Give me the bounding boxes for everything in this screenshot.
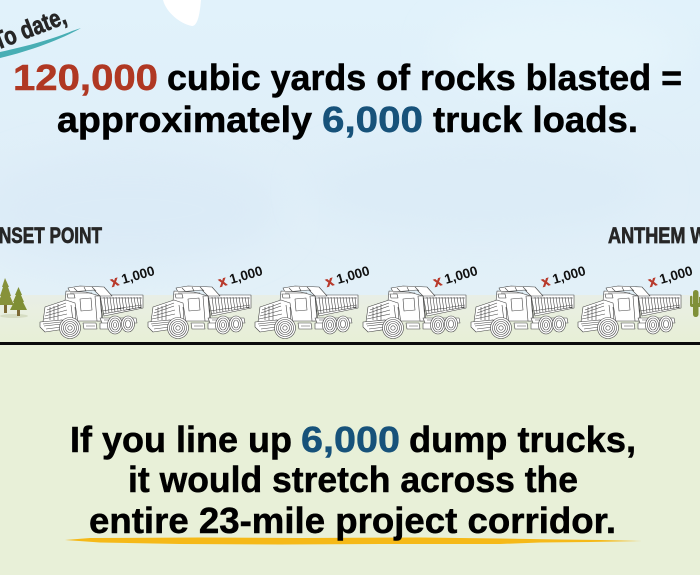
sky background bbox=[0, 0, 700, 300]
title: 6,000 bbox=[322, 99, 423, 140]
icon: pine trees bbox=[0, 278, 28, 318]
lower panel background bbox=[0, 345, 700, 575]
truck 3: x bbox=[323, 272, 336, 290]
truck 3 bbox=[255, 263, 371, 338]
truck 1: x bbox=[108, 272, 121, 290]
truck 4: x bbox=[431, 272, 444, 290]
truck 2 bbox=[148, 263, 264, 338]
truck 4: 1,000 bbox=[443, 263, 479, 287]
title: truck loads. bbox=[433, 99, 638, 140]
truck 5: 1,000 bbox=[551, 263, 587, 287]
bottom statement: 6,000 bbox=[301, 419, 400, 460]
truck 5 bbox=[471, 263, 587, 338]
title: 120,000 bbox=[13, 57, 158, 98]
bottom statement bbox=[70, 419, 636, 541]
truck 1: 1,000 bbox=[120, 263, 156, 287]
truck 6: x bbox=[646, 272, 659, 290]
underline brush stroke bbox=[65, 538, 642, 544]
truck 4 bbox=[363, 263, 479, 338]
ground line bbox=[0, 342, 700, 345]
bottom statement: entire 23-mile project corridor. bbox=[89, 500, 616, 541]
icon: cactus bbox=[690, 290, 700, 317]
truck 2: x bbox=[216, 272, 229, 290]
title bbox=[13, 57, 682, 140]
truck row bbox=[40, 263, 694, 338]
bottom statement: it would stretch across the bbox=[128, 459, 578, 500]
ground strip bbox=[0, 295, 700, 342]
title: cubic yards of rocks blasted = bbox=[167, 57, 682, 98]
truck 5: x bbox=[539, 272, 552, 290]
truck 1 bbox=[40, 263, 156, 338]
bottom statement: If you line up bbox=[70, 419, 292, 460]
truck 6 bbox=[578, 263, 694, 338]
title: approximately bbox=[57, 99, 312, 140]
truck 3: 1,000 bbox=[335, 263, 371, 287]
truck 6: 1,000 bbox=[658, 263, 694, 287]
truck 2: 1,000 bbox=[228, 263, 264, 287]
bottom statement: dump trucks, bbox=[409, 419, 636, 460]
